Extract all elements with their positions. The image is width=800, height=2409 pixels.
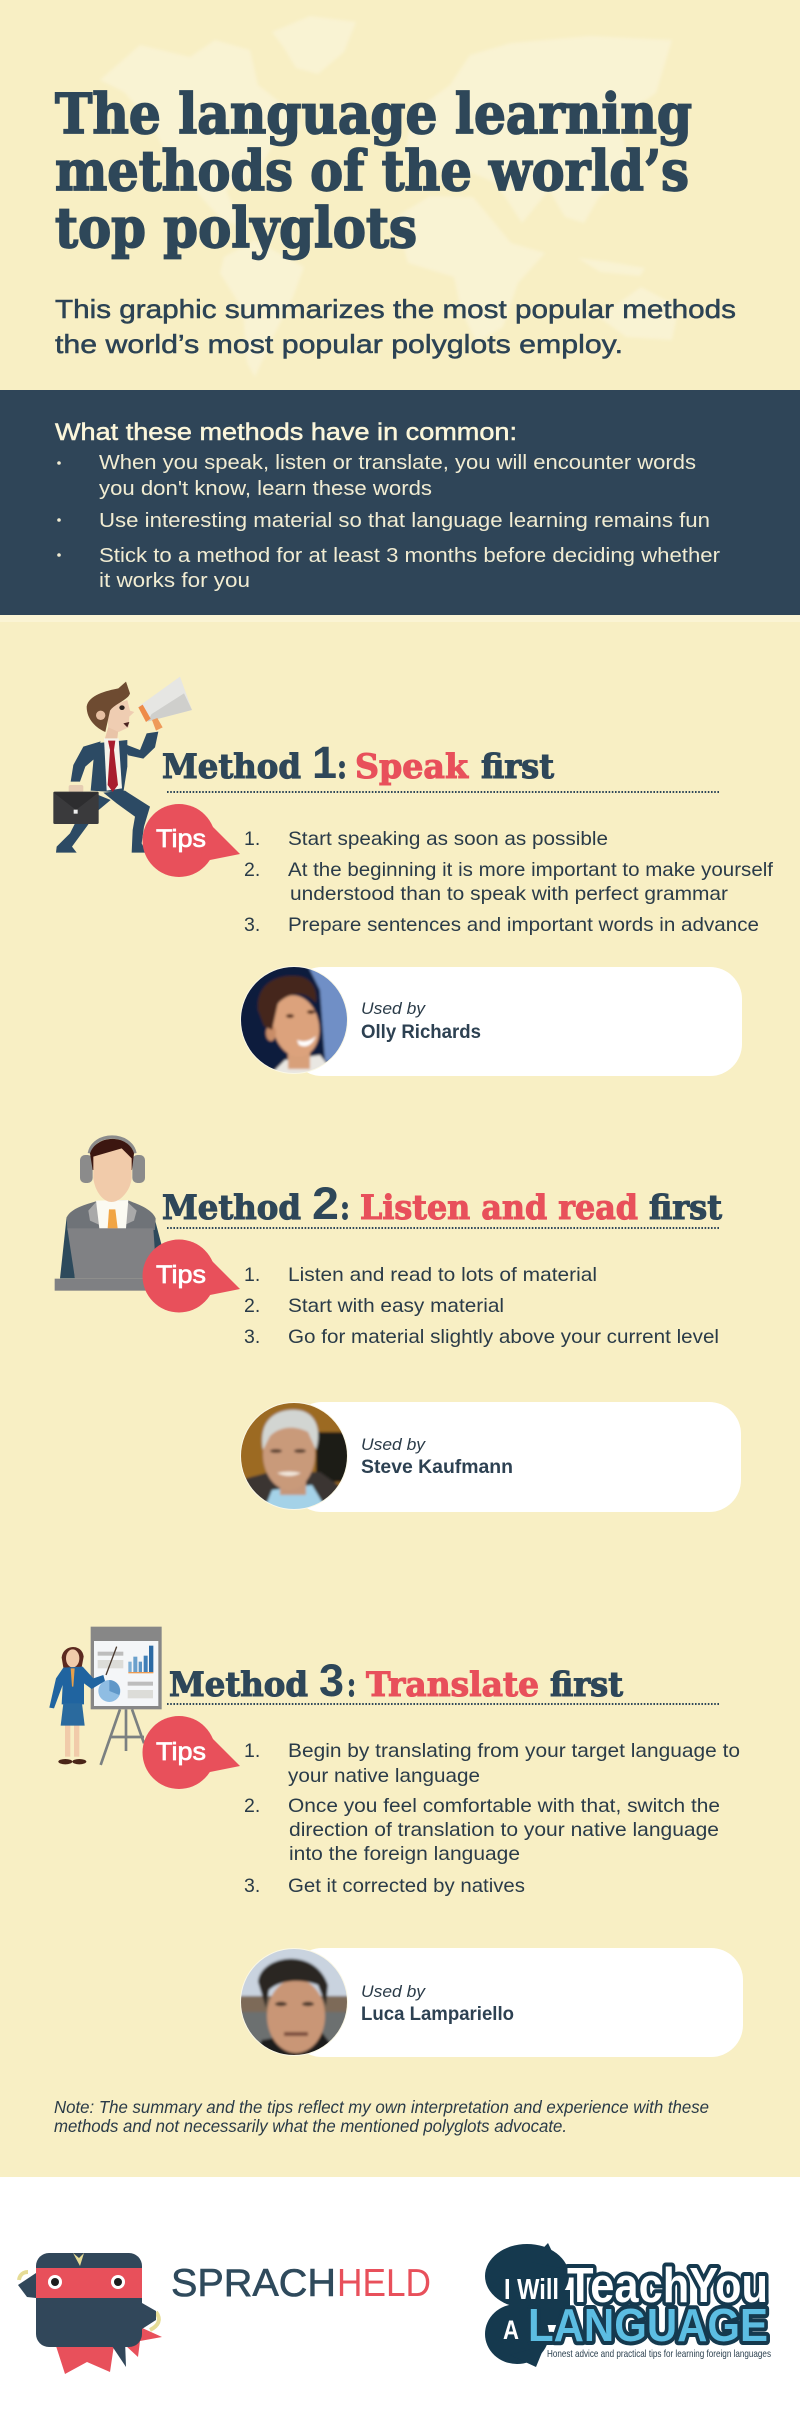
logo: Sprachheld wordmark: HELD bbox=[337, 2262, 431, 2305]
title bbox=[55, 81, 692, 260]
method 3 heading: : bbox=[347, 1665, 356, 1705]
common bullet list: it works for you bbox=[99, 570, 250, 592]
tips list 1: understood than to speak with perfect grammar bbox=[290, 883, 729, 905]
tips list 2: Listen and read to lots of material bbox=[288, 1264, 597, 1286]
method 3 heading: first bbox=[550, 1665, 623, 1705]
title: methods of the world’s bbox=[55, 138, 689, 203]
tips bubble 1 bbox=[142, 804, 240, 877]
method 1 heading: first bbox=[481, 747, 554, 787]
method 1 heading bbox=[162, 737, 554, 788]
icon: man with headphones at laptop bbox=[55, 1137, 161, 1291]
tips list 3: into the foreign language bbox=[289, 1843, 520, 1865]
tips list 2: 1. bbox=[244, 1264, 260, 1286]
method 2 heading: : bbox=[340, 1188, 350, 1228]
card text: Used by bbox=[361, 1983, 427, 2001]
method 2 heading: 2 bbox=[312, 1178, 339, 1229]
tips bubble 2 bbox=[142, 1240, 240, 1312]
method 2 heading: first bbox=[649, 1188, 722, 1228]
card text bbox=[361, 1983, 514, 2025]
method 1 heading: Method bbox=[162, 747, 301, 787]
portrait: Olly Richards bbox=[241, 967, 347, 1073]
method 3 heading: Method bbox=[169, 1665, 308, 1705]
tips list 1: Prepare sentences and important words in advance bbox=[288, 914, 759, 936]
logo: I Will Teach You A Language: TeachYou bbox=[567, 2259, 768, 2313]
method 3 heading: Translate bbox=[366, 1665, 539, 1705]
tips list 3 bbox=[244, 1740, 740, 1897]
portrait: Luca Lampariello bbox=[241, 1949, 347, 2055]
common bullet list: Use interesting material so that language learning remains fun bbox=[99, 510, 710, 532]
title: The language learning bbox=[55, 81, 692, 146]
method 3 heading bbox=[169, 1655, 623, 1706]
icon: woman presenting at flip chart bbox=[49, 1627, 162, 1765]
used by card: Olly Richards bbox=[235, 960, 742, 1080]
icon: man with megaphone and briefcase bbox=[53, 677, 192, 853]
method 1 heading: 1 bbox=[312, 737, 337, 788]
tips list 1: At the beginning it is more important to make yourself bbox=[288, 859, 774, 881]
method 3 heading: 3 bbox=[319, 1655, 344, 1706]
tips list 1: Start speaking as soon as possible bbox=[288, 828, 608, 850]
tips list 3: 3. bbox=[244, 1875, 260, 1897]
card text bbox=[361, 1000, 481, 1043]
tips list 3: your native language bbox=[288, 1765, 480, 1787]
tips list 3: Once you feel comfortable with that, switch the bbox=[288, 1795, 720, 1817]
tips list 3: 2. bbox=[244, 1795, 260, 1817]
logo: I Will Teach You A Language: LANGUAGE bbox=[528, 2299, 768, 2351]
tips list 1: 3. bbox=[244, 914, 260, 936]
title: top polyglots bbox=[55, 195, 417, 260]
method 2 heading: Listen and read bbox=[360, 1188, 638, 1228]
card text: Steve Kaufmann bbox=[361, 1457, 513, 1478]
card text: Olly Richards bbox=[361, 1022, 481, 1043]
tips list 2: 3. bbox=[244, 1326, 260, 1348]
common bullet list bbox=[57, 452, 720, 592]
subtitle bbox=[55, 294, 736, 359]
note: methods and not necessarily what the mentioned polyglots advocate. bbox=[54, 2116, 567, 2136]
common bullet list: you don't know, learn these words bbox=[99, 478, 432, 500]
logo: I Will Teach You A Language bbox=[485, 2243, 771, 2367]
panel: what these methods have in common bbox=[0, 390, 800, 622]
tips bubble 3: Tips bbox=[156, 1738, 206, 1766]
tips list 2: Go for material slightly above your current level bbox=[288, 1326, 719, 1348]
tips list 2 bbox=[244, 1264, 719, 1348]
common bullet list: When you speak, listen or translate, you will encounter words bbox=[99, 452, 696, 474]
portrait: Steve Kaufmann bbox=[241, 1403, 347, 1509]
method 1 heading: Speak bbox=[355, 747, 469, 787]
card text bbox=[361, 1436, 513, 1478]
method 2 heading: Method bbox=[162, 1188, 301, 1228]
logo: Sprachheld wordmark bbox=[171, 2262, 431, 2305]
logo: Sprachheld ninja bbox=[18, 2253, 162, 2374]
footer panel bbox=[0, 2177, 800, 2409]
common heading: What these methods have in common: bbox=[55, 419, 517, 446]
tips bubble 3 bbox=[142, 1716, 240, 1789]
method 1 heading: : bbox=[337, 747, 347, 787]
tips list 3: 1. bbox=[244, 1740, 260, 1762]
logo: I Will Teach You A Language: I Will bbox=[504, 2274, 559, 2306]
common bullet list: Stick to a method for at least 3 months before deciding whether bbox=[99, 545, 720, 567]
tips list 2: 2. bbox=[244, 1295, 260, 1317]
tips list 3: direction of translation to your native language bbox=[289, 1819, 719, 1841]
tips list 1: 1. bbox=[244, 828, 260, 850]
card text: Used by bbox=[361, 1436, 427, 1454]
tips list 1: 2. bbox=[244, 859, 260, 881]
tips list 3: Begin by translating from your target language to bbox=[288, 1740, 740, 1762]
tips bubble 1: Tips bbox=[156, 825, 206, 853]
subtitle: the world’s most popular polyglots employ. bbox=[55, 329, 623, 359]
used by card: Luca Lampariello bbox=[240, 1948, 743, 2057]
card text: Luca Lampariello bbox=[361, 2004, 514, 2025]
subtitle: This graphic summarizes the most popular methods bbox=[55, 294, 736, 324]
tips list 1 bbox=[244, 828, 774, 936]
logo: Sprachheld wordmark: SPRACH bbox=[171, 2262, 336, 2305]
card text: Used by bbox=[361, 1000, 427, 1018]
note: Note: The summary and the tips reflect my own interpretation and experience with these bbox=[54, 2097, 709, 2117]
logo: I Will Teach You A Language: A bbox=[503, 2315, 519, 2345]
tips list 2: Start with easy material bbox=[288, 1295, 504, 1317]
world map background bbox=[100, 16, 679, 377]
note bbox=[54, 2097, 709, 2136]
tips list 3: Get it corrected by natives bbox=[288, 1875, 525, 1897]
tips bubble 2: Tips bbox=[156, 1261, 206, 1289]
used by card: Steve Kaufmann bbox=[235, 1395, 741, 1515]
method 2 heading bbox=[162, 1178, 722, 1229]
